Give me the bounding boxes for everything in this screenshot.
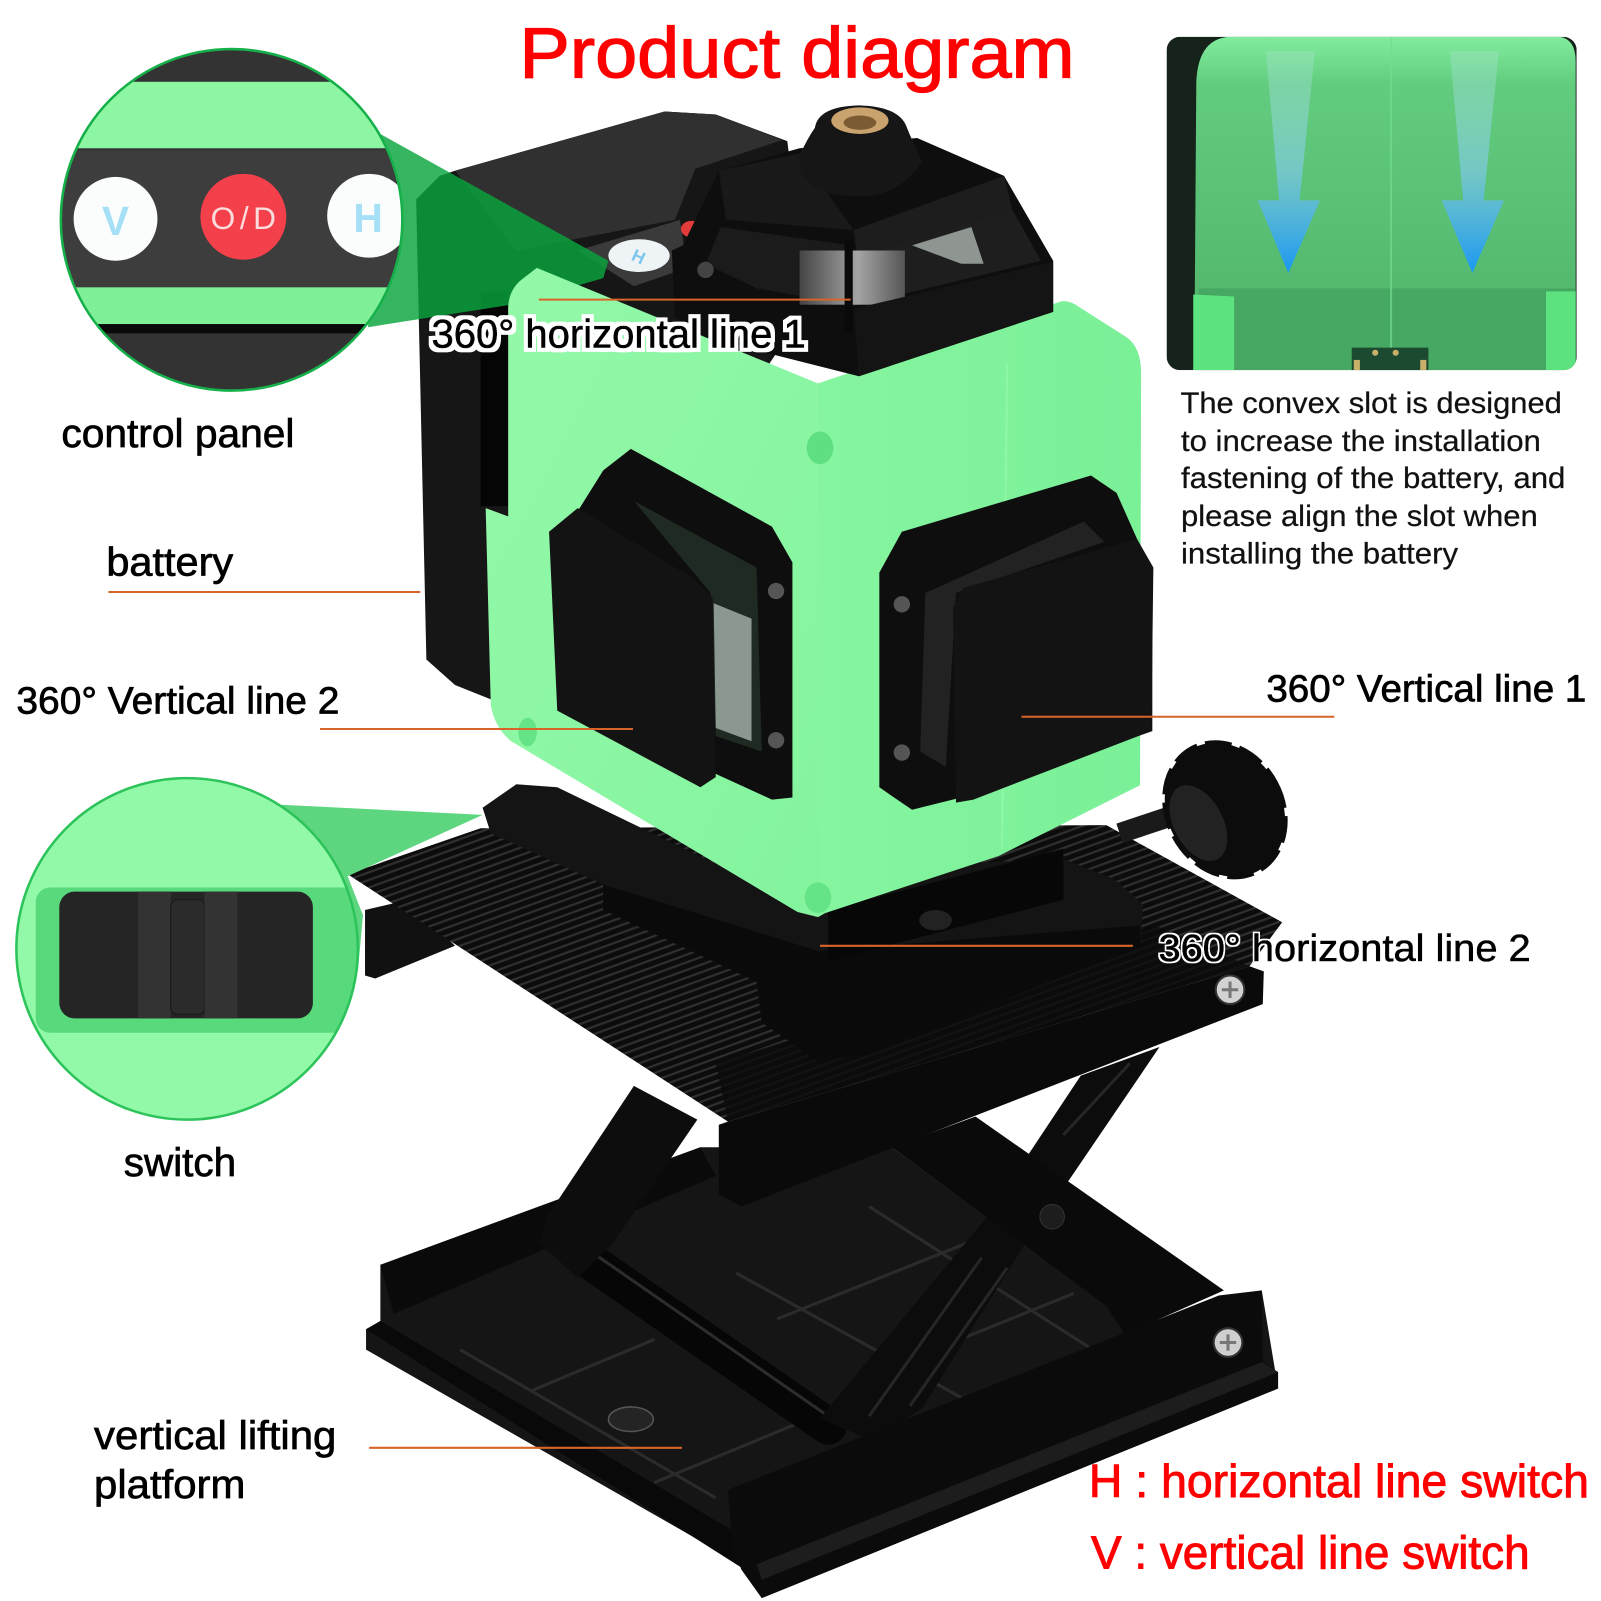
circuit contacts [1352,348,1428,370]
label: control panel: control panel [61,412,294,456]
inset circle: control panel [60,49,411,392]
product: laser level on lifting platform [348,105,1308,1598]
legend: switch key: H : horizontal line switch [1089,1455,1589,1507]
control panel on device [578,220,701,286]
roller bar [578,1253,828,1426]
front rail with screw [728,1290,1278,1598]
slide switch [59,892,313,1018]
label: vertical lifting platform [94,1414,336,1507]
leader line: vertical line 1 [1021,716,1334,718]
label: 360 vertical line 2: 360° Vertical line 2 [16,681,339,723]
button: O/D: O/D [211,200,276,236]
label: switch: switch [124,1141,236,1185]
leader line: battery [108,591,420,593]
label: battery: battery [106,541,233,585]
description text: fastening of the battery, and [1181,462,1565,495]
lifting platform base [366,1147,1278,1598]
button: H: H [353,195,383,241]
label: vertical lifting platform: vertical lifting [94,1414,336,1458]
button: H [327,174,402,258]
description text: please align the slot when [1181,500,1538,533]
battery pack [416,111,808,716]
green housing [486,268,1141,917]
mount [483,784,1143,1061]
legend: switch key: V : vertical line switch [1091,1526,1530,1578]
leader line: horizontal line 1 [539,299,851,301]
adjustment knob [1120,722,1308,898]
upper ribbed platform [348,825,1282,1207]
inset: battery slot photo [1167,37,1577,370]
label: 360 horizontal line 2: 360° horizontal line 2 [1158,928,1531,970]
laser head top [672,105,1053,376]
green callout beam: switch [281,805,483,971]
description text: installing the battery [1181,537,1458,570]
control panel on device: H [629,245,648,268]
scissor arms [539,1047,1224,1442]
arrow: right [1442,51,1504,273]
arrow: left [1258,51,1320,273]
description text: to increase the installation [1181,425,1541,458]
button: O/D [200,174,286,260]
right laser window [879,475,1153,810]
description text: The convex slot is designed [1180,387,1562,420]
legend: switch key [1089,1455,1589,1578]
inset circle: switch [15,777,359,1121]
green callout beam: control panel [368,133,608,327]
label: 360 vertical line 1: 360° Vertical line 1 [1266,668,1586,710]
label: vertical lifting platform: platform [94,1463,245,1507]
left laser window [549,449,792,800]
description text [1180,387,1565,570]
button: V: V [102,198,129,244]
title: Product diagram [519,14,1075,94]
button: V [74,177,157,261]
label: 360 horizontal line 1: 360° horizontal line 1 [431,313,806,357]
leader line: vertical line 2 [320,728,633,730]
leader line: lifting platform [369,1447,682,1449]
leader line: horizontal line 2 [820,945,1133,947]
